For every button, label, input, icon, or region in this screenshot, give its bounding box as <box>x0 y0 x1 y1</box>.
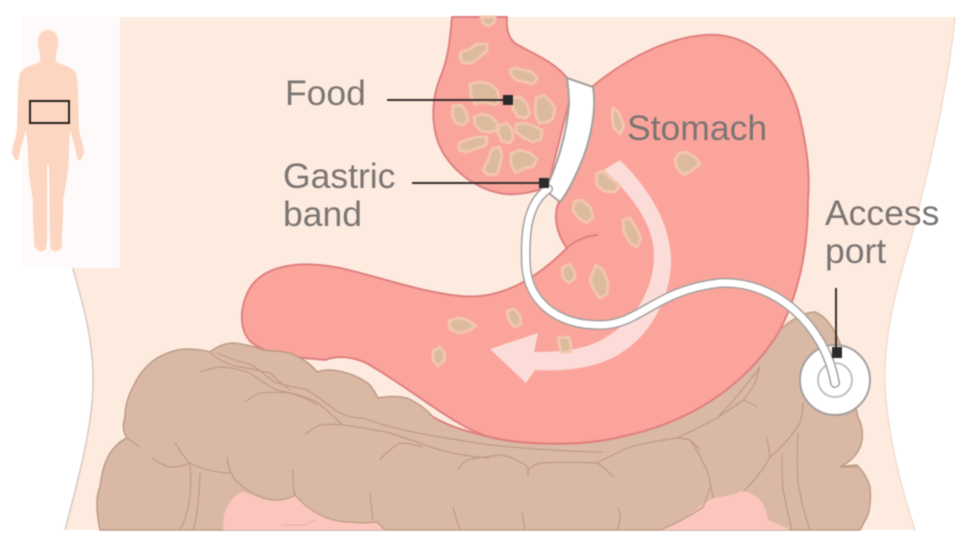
colon <box>97 312 870 530</box>
stomach pouch <box>433 17 572 194</box>
label: gastric band: Gastric <box>283 156 395 196</box>
food pieces <box>433 17 700 366</box>
label: access port <box>825 193 939 358</box>
band tube <box>526 189 835 383</box>
label: food: Food <box>285 73 366 113</box>
label: gastric band <box>283 156 549 234</box>
label: gastric band: band <box>283 194 362 234</box>
icon: locator rectangle <box>30 101 69 123</box>
leader: gastric band <box>412 178 549 188</box>
stomach <box>242 35 809 444</box>
label: food <box>285 73 513 113</box>
access port <box>800 345 870 415</box>
panel: body locator inset <box>12 17 120 268</box>
label: stomach: Stomach <box>627 108 767 148</box>
arrow: food direction <box>490 160 671 383</box>
label: access port: port <box>825 231 886 271</box>
gastric band <box>545 78 594 202</box>
leader: access port <box>832 288 842 358</box>
icon: human silhouette <box>12 30 84 251</box>
stomach fold <box>567 235 598 248</box>
label: access port: Access <box>825 193 939 233</box>
leader: food <box>387 95 513 105</box>
small intestine <box>223 490 790 530</box>
